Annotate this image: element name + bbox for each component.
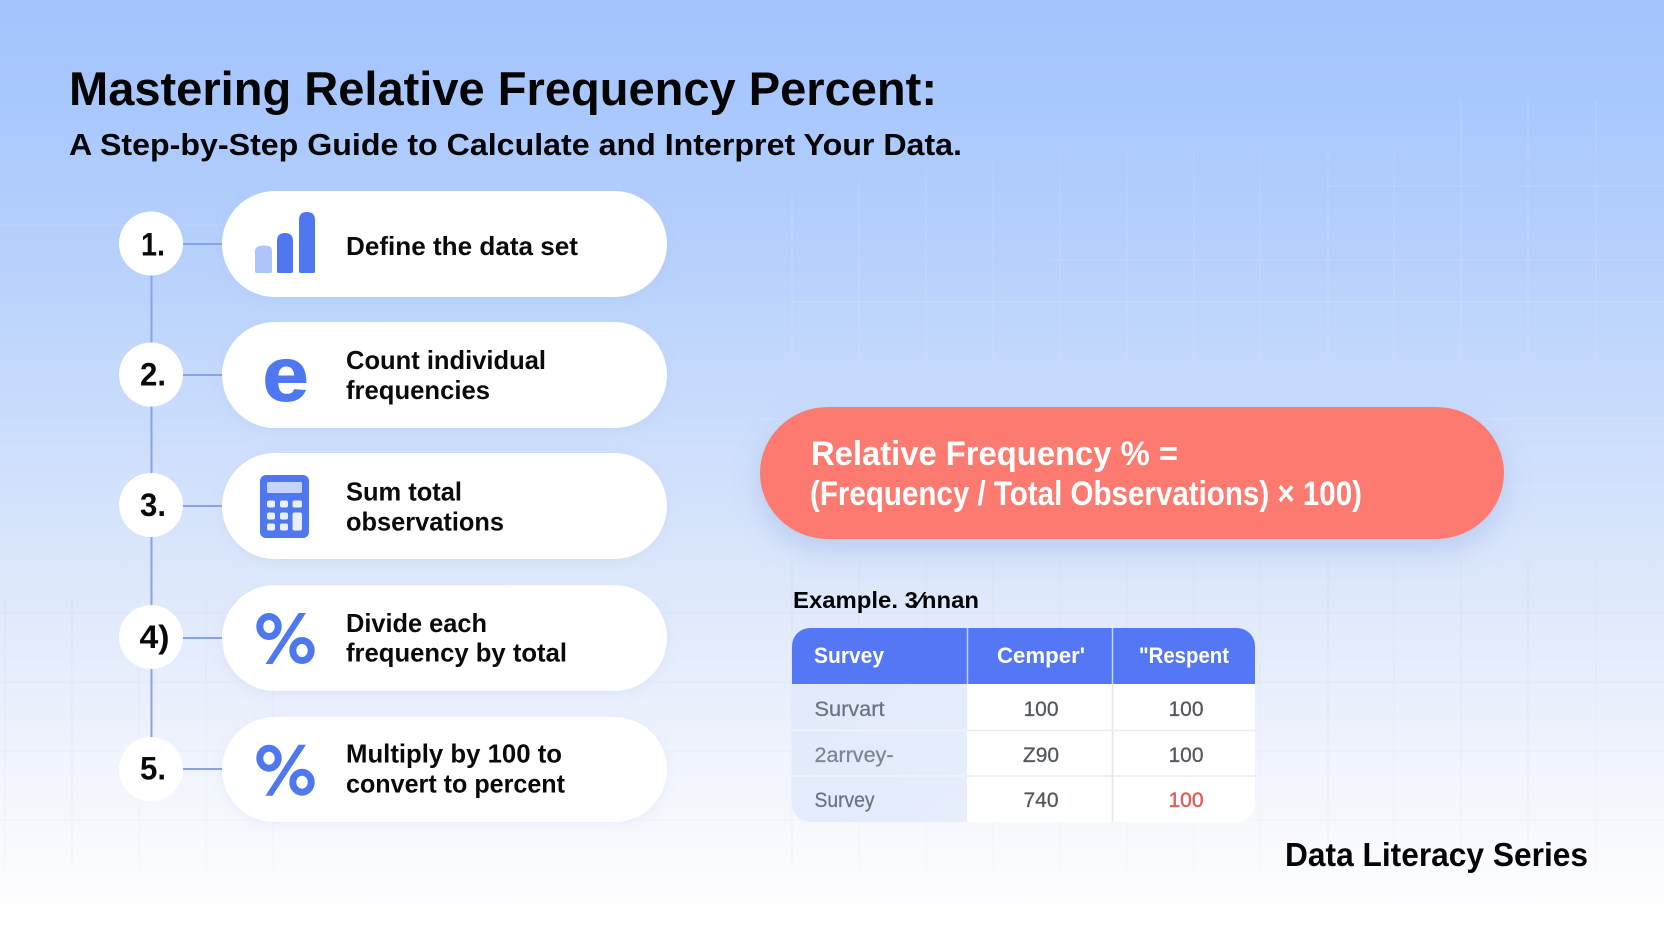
step 1 pill: [222, 191, 667, 297]
table row 3: 740: [1023, 789, 1059, 812]
table row 3: [814, 789, 1204, 812]
table row 3: Survey: [814, 789, 875, 812]
step 5 number badge: [119, 737, 183, 801]
example table: [792, 628, 1255, 822]
example heading: Example. 3⁄nnan: [793, 587, 979, 613]
step 4 pill: [222, 585, 667, 691]
formula pill background: [760, 407, 1504, 539]
title: Mastering Relative Frequency Percent:: [69, 62, 937, 115]
icon: letter e: e: [262, 331, 309, 417]
table row 1: Survart: [814, 698, 885, 721]
step 2 number badge: 2.: [140, 356, 166, 392]
step 3 number badge: [119, 473, 183, 537]
icon: calculator: [260, 475, 309, 538]
step 2: [119, 322, 667, 428]
step 2 label: frequencies: [346, 375, 490, 405]
table row 1: 100: [1023, 698, 1059, 721]
table header row: "Respent: [1139, 643, 1230, 668]
step 3: [119, 453, 667, 559]
step 2 label: Count individual: [346, 345, 546, 375]
table row 1: [814, 698, 1204, 721]
formula text: (Frequency / Total Observations) × 100): [810, 475, 1362, 513]
step 2 pill: [222, 322, 667, 428]
step 4: [119, 585, 667, 691]
table header row: Cemper': [997, 643, 1085, 668]
formula text: Relative Frequency % =: [811, 435, 1178, 473]
step 1 number badge: 1.: [141, 226, 165, 262]
step 4 label: frequency by total: [346, 638, 567, 668]
table row 2: 100: [1168, 744, 1204, 767]
table header row: Survey: [814, 643, 885, 668]
step 2 number badge: [119, 342, 183, 406]
icon: bar chart: [255, 212, 315, 273]
step 3 label: Sum total: [346, 476, 462, 506]
step 5: [119, 717, 667, 822]
step 1 number badge: [119, 212, 183, 276]
step 4 number badge: 4): [140, 619, 170, 655]
step 3 label: observations: [346, 506, 504, 536]
step 1 label: Define the data set: [346, 231, 578, 261]
table row 2: Z90: [1023, 744, 1059, 767]
icon: percent sign: [260, 745, 311, 796]
step 5 pill: [222, 717, 667, 822]
step 5 label: convert to percent: [346, 768, 565, 798]
table row 1: 100: [1168, 698, 1204, 721]
step 3 number badge: 3.: [140, 487, 166, 523]
subtitle: A Step-by-Step Guide to Calculate and Interpret Your Data.: [69, 127, 962, 162]
step 5 label: Multiply by 100 to: [346, 738, 562, 768]
table body: [792, 628, 1255, 822]
table row 2: [814, 744, 1204, 767]
step 4 number badge: [119, 605, 183, 669]
table row 3: 100: [1168, 789, 1204, 812]
series label: Data Literacy Series: [1285, 836, 1588, 873]
icon: percent sign: [260, 613, 311, 664]
step 3 pill: [222, 453, 667, 559]
step 1: [119, 191, 667, 297]
step 5 number badge: 5.: [140, 750, 166, 786]
formula callout: [760, 407, 1504, 539]
table header row: [814, 643, 1230, 668]
step 4 label: Divide each: [346, 608, 487, 638]
table row 2: 2arrvey-: [814, 744, 894, 767]
timeline connectors: [152, 244, 225, 769]
